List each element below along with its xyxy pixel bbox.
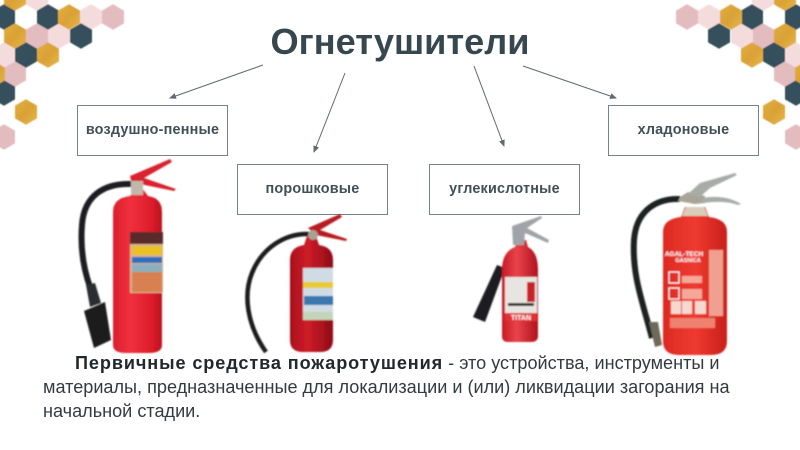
category box: halon: [608, 105, 759, 156]
category box: halon: хладоновые: [638, 122, 729, 138]
category box: carbon dioxide: [429, 164, 580, 215]
extinguisher: halon: [634, 173, 741, 355]
category box: powder: [237, 164, 388, 215]
description paragraph: [43, 353, 730, 421]
extinguisher: carbon dioxide: TITAN: [511, 315, 531, 322]
description paragraph: начальной стадии.: [43, 401, 200, 421]
extinguisher: foam: [81, 159, 176, 353]
category box: carbon dioxide: углекислотные: [449, 181, 560, 197]
title: Огнетушители: [271, 21, 529, 62]
extinguisher: halon: AGAL-TECH: [665, 251, 703, 258]
extinguisher: powder: [247, 214, 347, 352]
description paragraph: Первичные средства пожаротушения - это устройства, инструменты и: [75, 353, 720, 373]
extinguisher: carbon dioxide: [473, 216, 549, 342]
category box: foam: [77, 105, 228, 156]
description paragraph: материалы, предназначенные для локализации и (или) ликвидации загорания на: [43, 377, 730, 397]
extinguisher: halon: GASNICA: [675, 258, 701, 264]
category box: powder: порошковые: [265, 181, 360, 197]
category box: foam: воздушно-пенные: [86, 122, 219, 138]
